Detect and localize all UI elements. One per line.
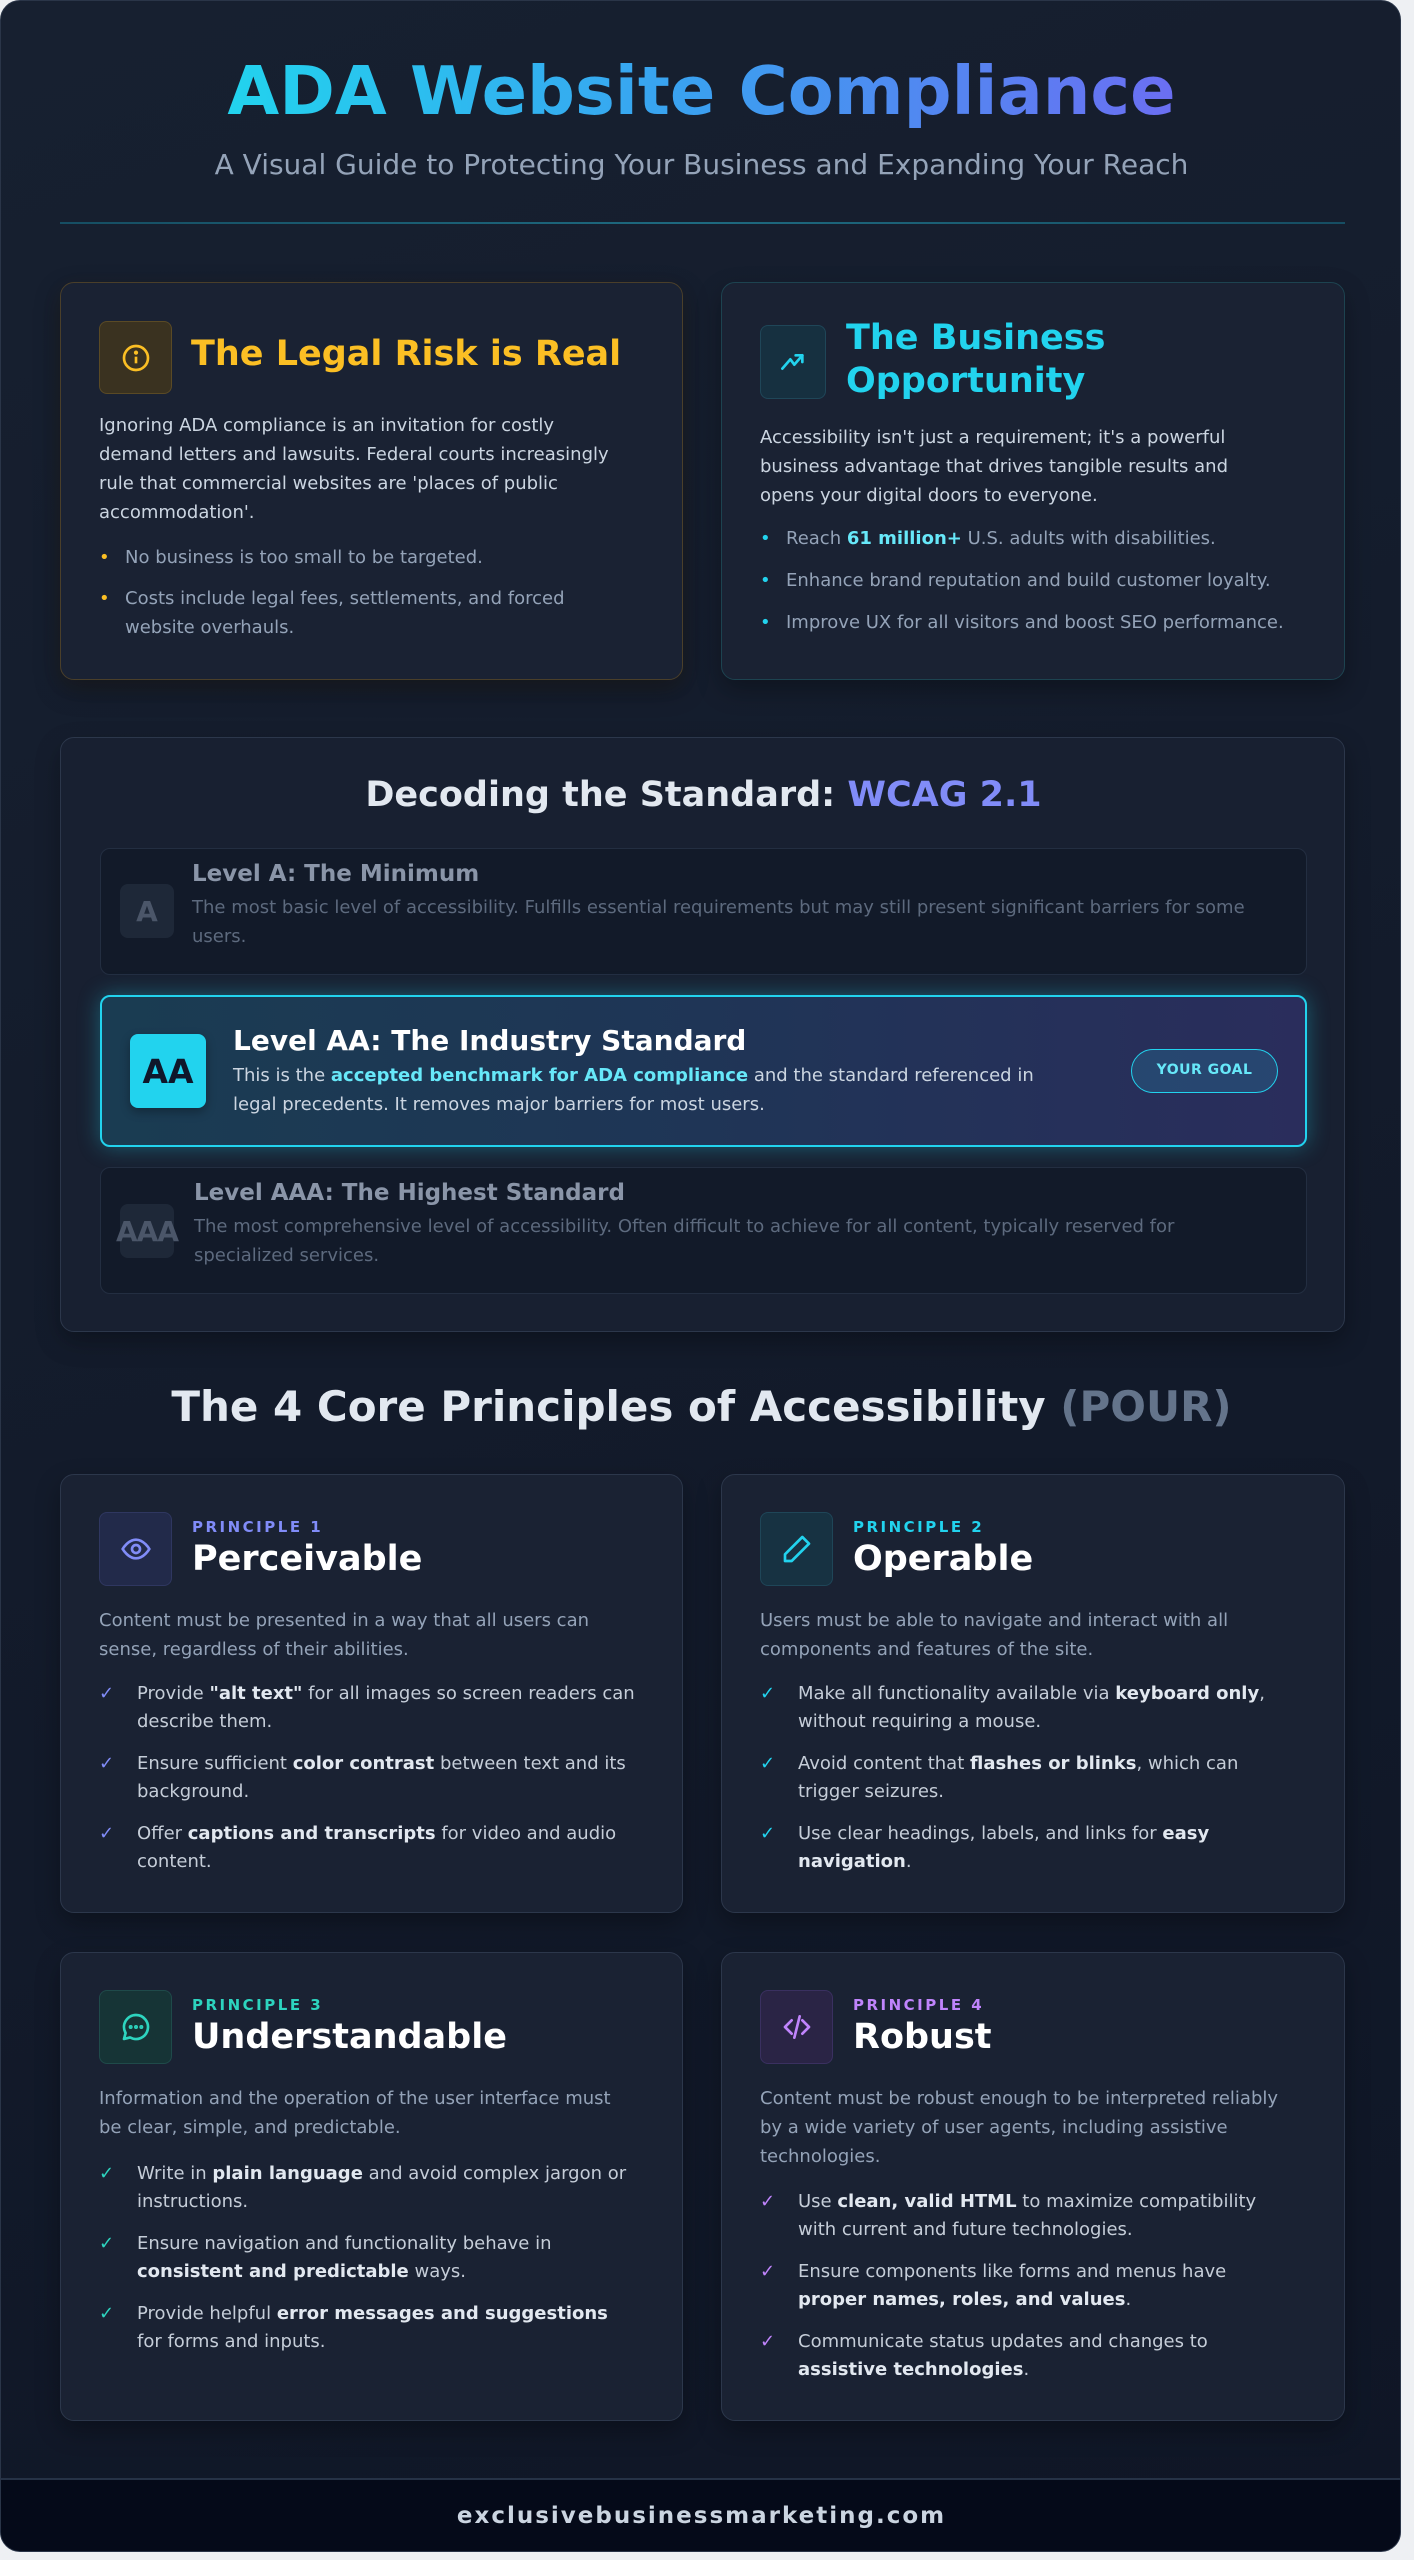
panel: principle 2: Make all functionality available via keyboard only, without requiring a mouse. [798, 1683, 1265, 1732]
level AA: This is the accepted benchmark for ADA compliance and the standard referenced in legal precedents. It removes major barriers for most users. [233, 1065, 1034, 1115]
heading: Decoding the Standard: WCAG 2.1 [365, 775, 1042, 815]
level AAA: AAA [116, 1214, 178, 1248]
panel: principle 2: ✓ [760, 1753, 775, 1774]
level AAA: The most comprehensive level of accessibility. Often difficult to achieve for all content, typically reserved for specialized services. [194, 1216, 1174, 1266]
panel: principle 2: ✓ [760, 1823, 775, 1844]
panel: principle 1: ✓ [99, 1823, 114, 1844]
bullets: • [99, 547, 110, 568]
panel: principle 3: PRINCIPLE 3 [192, 1996, 323, 2014]
level A [100, 848, 1307, 975]
text block: Accessibility isn't just a requirement; it's a powerful business advantage that drives tangible results and opens your digital doors to everyone. [760, 427, 1228, 506]
level AA [100, 995, 1307, 1147]
panel: principle 1: Ensure sufficient color contrast between text and its background. [137, 1753, 626, 1802]
panel: principle 1: Offer captions and transcripts for video and audio content. [137, 1823, 616, 1872]
panel: principle 3: Provide helpful error messages and suggestions for forms and inputs. [137, 2303, 608, 2352]
icon: pencil [760, 1512, 833, 1586]
panel: principle 1 [60, 1474, 683, 1913]
bullets: Improve UX for all visitors and boost SEO performance. [786, 612, 1284, 633]
panel: principle 1: Content must be presented in a way that all users can sense, regardless of their abilities. [99, 1610, 589, 1660]
panel: principle 4: Content must be robust enough to be interpreted reliably by a wide variety of user agents, including assistive technologies. [760, 2088, 1278, 2167]
level A: The most basic level of accessibility. Fulfills essential requirements but may still present significant barriers for some users. [192, 897, 1245, 947]
heading [846, 318, 1105, 401]
heading: Opportunity [846, 361, 1085, 401]
bullets: No business is too small to be targeted. [125, 547, 483, 568]
level AA: Level AA: The Industry Standard [233, 1024, 746, 1057]
icon: eye [99, 1512, 172, 1586]
panel: principle 2: PRINCIPLE 2 [853, 1518, 984, 1536]
panel: WCAG [60, 737, 1345, 1332]
footer: exclusivebusinessmarketing.com [457, 2503, 946, 2529]
panel: principle 3: Understandable [192, 2017, 507, 2057]
bullets [99, 547, 564, 638]
level A: Level A: The Minimum [192, 861, 479, 887]
panel: principle 4: Robust [853, 2017, 992, 2057]
panel: principle 4 [721, 1952, 1345, 2421]
panel: legal risk [60, 282, 683, 680]
panel: principle 3 [60, 1952, 683, 2421]
bullets: Enhance brand reputation and build customer loyalty. [786, 570, 1271, 591]
panel: principle 1: Provide "alt text" for all images so screen readers can describe them. [137, 1683, 635, 1732]
panel: principle 3: ✓ [99, 2233, 114, 2254]
panel: principle 4: Ensure components like forms and menus have proper names, roles, and values. [798, 2261, 1226, 2310]
heading: The Legal Risk is Real [191, 334, 621, 374]
panel: principle 4: ✓ [760, 2261, 775, 2282]
footer [1, 2478, 1402, 2553]
text block: Ignoring ADA compliance is an invitation for costly demand letters and lawsuits. Federal courts increasingly rule that commercial websites are 'places of public accommodation'. [99, 415, 609, 523]
icon: code [760, 1990, 833, 2064]
icon: info [99, 321, 172, 394]
panel: principle 2: Use clear headings, labels, and links for easy navigation. [798, 1823, 1209, 1872]
bullets: • [99, 588, 110, 609]
panel: principle 4: ✓ [760, 2191, 775, 2212]
bullets: • [760, 612, 771, 633]
panel: principle 4: ✓ [760, 2331, 775, 2352]
title: ADA Website Compliance [227, 52, 1176, 130]
panel: principle 3: Information and the operation of the user interface must be clear, simple, and predictable. [99, 2088, 611, 2138]
panel: principle 2: Operable [853, 1539, 1033, 1579]
heading: The Business [846, 318, 1105, 358]
level AA: AA [142, 1052, 194, 1090]
icon: chat [99, 1990, 172, 2064]
panel: principle 1: Perceivable [192, 1539, 422, 1579]
panel: business opportunity [721, 282, 1345, 680]
badge [1131, 1049, 1278, 1093]
badge: YOUR GOAL [1157, 1062, 1252, 1078]
panel: principle 1: ✓ [99, 1753, 114, 1774]
level AAA [100, 1167, 1307, 1294]
heading: POUR: The 4 Core Principles of Accessibility (POUR) [171, 1382, 1232, 1431]
level A: A [136, 894, 158, 928]
bullets: • [760, 528, 771, 549]
bullets: • [760, 570, 771, 591]
level AAA: Level AAA: The Highest Standard [194, 1180, 625, 1206]
panel: principle 3: ✓ [99, 2303, 114, 2324]
panel: principle 2: Avoid content that flashes or blinks, which can trigger seizures. [798, 1753, 1238, 1802]
icon: trend [760, 325, 826, 399]
bullets: Reach 61 million+ U.S. adults with disabilities. [786, 528, 1216, 549]
subtitle: A Visual Guide to Protecting Your Business and Expanding Your Reach [215, 148, 1188, 181]
panel: principle 4: Communicate status updates and changes to assistive technologies. [798, 2331, 1208, 2380]
panel: principle 2: Users must be able to navigate and interact with all components and features of the site. [760, 1610, 1228, 1660]
panel: principle 1: PRINCIPLE 1 [192, 1518, 323, 1536]
panel: principle 3: Write in plain language and avoid complex jargon or instructions. [137, 2163, 626, 2212]
panel: principle 2: ✓ [760, 1683, 775, 1704]
panel: principle 2 [721, 1474, 1345, 1913]
panel: principle 3: Ensure navigation and functionality behave in consistent and predictable ways. [137, 2233, 552, 2282]
bullets: Costs include legal fees, settlements, and forced website overhauls. [125, 588, 564, 638]
panel: principle 3: ✓ [99, 2163, 114, 2184]
panel: principle 4: Use clean, valid HTML to maximize compatibility with current and future technologies. [798, 2191, 1256, 2240]
bullets [760, 528, 1284, 633]
panel: principle 1: ✓ [99, 1683, 114, 1704]
panel: principle 4: PRINCIPLE 4 [853, 1996, 984, 2014]
